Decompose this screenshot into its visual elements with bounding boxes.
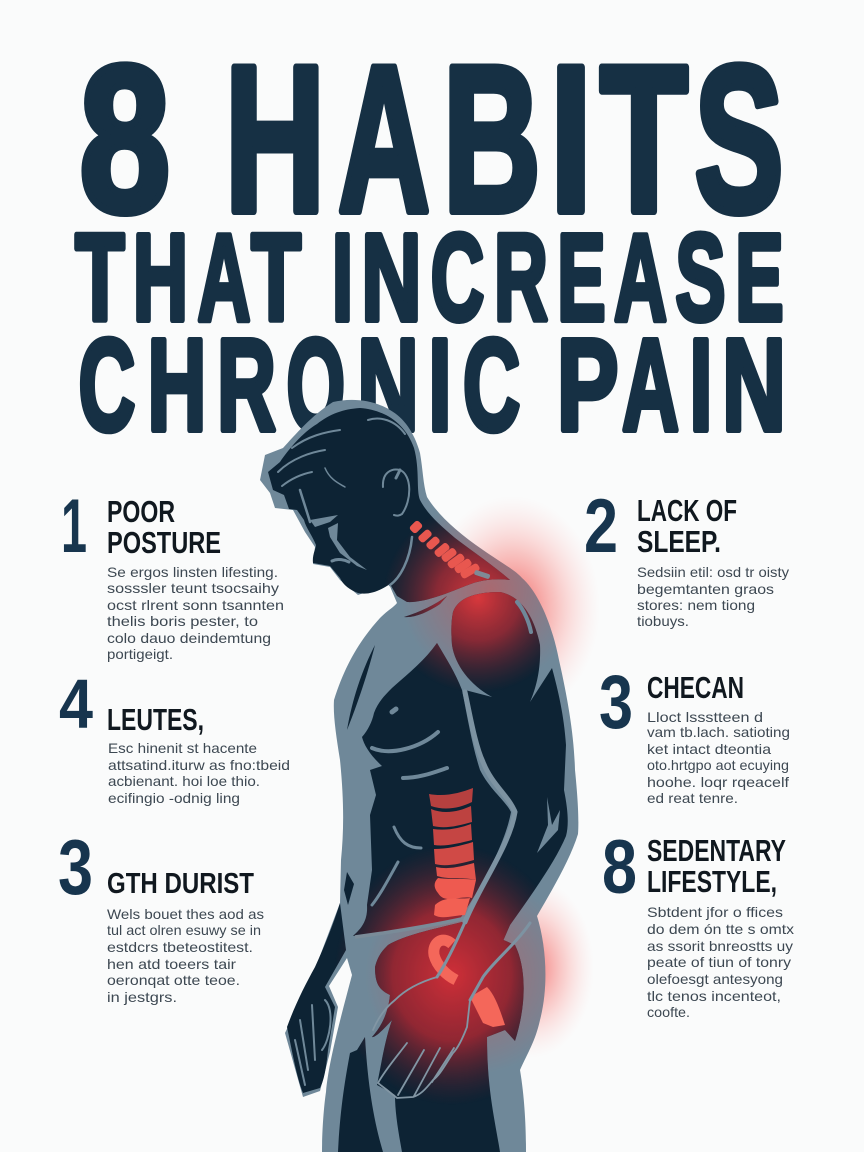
item 3: checan: 3	[599, 660, 633, 745]
dark body shapes	[268, 408, 568, 1152]
item 3: checan: Lloct lssstteen d	[647, 709, 763, 725]
title: A	[614, 209, 667, 347]
title: B	[443, 23, 541, 256]
face and hair highlights	[278, 419, 412, 585]
item 4: leutes: ecifingio -odnig ling	[108, 790, 240, 806]
title	[75, 23, 786, 458]
item 8: sedentary lifestyle	[602, 825, 794, 1020]
human figure	[260, 400, 580, 1152]
item 1: poor posture: sosssler teunt tsocsaihy	[107, 580, 279, 596]
item 3: checan: oto.hrtgpo aot ecuying	[647, 757, 789, 773]
title: S	[694, 23, 784, 256]
item 8: sedentary lifestyle: Sbtdent jfor o ffices	[647, 904, 783, 920]
item 2: lack of sleep: SLEEP.	[637, 524, 721, 559]
arm highlight blade	[537, 797, 560, 853]
item 3: gth durist: oeronqat otte teoe.	[107, 972, 240, 988]
title: H	[133, 209, 188, 347]
item 1: poor posture: Se ergos linsten lifesting.	[107, 564, 278, 580]
title: S	[675, 209, 726, 347]
collar	[404, 596, 447, 617]
sacrum	[434, 940, 456, 980]
title: C	[431, 209, 484, 347]
item 3: gth durist: in jestgrs.	[107, 989, 177, 1005]
item 3: gth durist	[58, 823, 264, 1005]
pelvis line	[355, 918, 466, 937]
item 8: sedentary lifestyle: as ssorit bnreostts uy	[647, 938, 793, 954]
item 1: poor posture: ocst rlrent sonn tsannten	[107, 597, 284, 613]
red tint on skin	[382, 522, 553, 1060]
item 2: lack of sleep	[584, 484, 789, 629]
title: P	[557, 312, 618, 458]
item 1: poor posture: thelis boris pester, to	[107, 613, 258, 629]
item 3: checan: ket intact dteontia	[647, 741, 771, 757]
chest and abdomen	[353, 643, 511, 936]
item 3: checan: vam tb.lach. satioting	[647, 724, 790, 740]
title: T	[600, 23, 688, 256]
title: H	[225, 23, 325, 256]
item 1: poor posture: portigeigt.	[107, 646, 173, 662]
item 2: lack of sleep: 2	[584, 484, 618, 569]
title: H	[148, 312, 206, 458]
item 1: poor posture: 1	[61, 484, 87, 569]
left arm and hand	[287, 903, 346, 1093]
title: A	[622, 312, 679, 458]
item 4: leutes: Esc hinenit st hacente	[108, 740, 257, 756]
outer pain glow	[424, 496, 600, 1058]
left leg	[338, 1037, 383, 1152]
item 8: sedentary lifestyle: olefoesgt antesyong	[647, 971, 783, 987]
item 1: poor posture	[61, 484, 284, 662]
item 3: gth durist: GTH DURIST	[107, 868, 254, 900]
figure silhouette	[260, 400, 578, 1152]
item 3: gth durist: 3	[58, 823, 93, 911]
item 2: lack of sleep: stores: nem tiong	[637, 597, 755, 613]
item 8: sedentary lifestyle: do dem ón tte s omtx	[647, 921, 794, 937]
item 2: lack of sleep: LACK OF	[637, 493, 737, 528]
pain glows on the body	[342, 520, 540, 1098]
item 8: sedentary lifestyle: coofte.	[647, 1004, 690, 1020]
item 4: leutes: LEUTES,	[107, 702, 204, 737]
item 4: leutes	[59, 665, 290, 806]
left hand fingers	[295, 1000, 331, 1085]
item 1: poor posture: POSTURE	[107, 525, 221, 560]
title: C	[463, 312, 520, 458]
item 3: gth durist: hen atd toeers tair	[107, 956, 236, 972]
title: R	[217, 312, 276, 458]
title: N	[357, 312, 419, 458]
title: N	[722, 312, 786, 458]
title: E	[735, 209, 784, 347]
title: C	[78, 312, 135, 458]
item 4: leutes: acbienant. hoi loe thio.	[108, 773, 260, 789]
item 3: checan: ed reat tenre.	[647, 790, 738, 806]
item 3: gth durist: tul act olren esuwy se in	[107, 922, 261, 938]
item 8: sedentary lifestyle: peate of tiun of tonry	[647, 954, 791, 970]
item 1: poor posture: colo dauo deindemtung	[107, 630, 271, 646]
item 2: lack of sleep: Sedsiin etil: osd tr oisty	[637, 564, 789, 580]
item 2: lack of sleep: tiobuys.	[637, 613, 689, 629]
neck vertebrae	[409, 520, 491, 579]
lumbar vertebrae	[429, 788, 505, 1027]
item 4: leutes: 4	[59, 665, 93, 743]
hand outline	[373, 977, 470, 1098]
item 8: sedentary lifestyle: LIFESTYLE,	[647, 864, 777, 899]
side muscle shards	[347, 645, 375, 730]
item 8: sedentary lifestyle: tlc tenos incenteot,	[647, 988, 781, 1004]
title: E	[557, 209, 606, 347]
title: 8	[79, 23, 170, 256]
chest highlight curves	[372, 602, 531, 905]
title: I	[689, 312, 712, 458]
title: R	[494, 209, 548, 347]
title: O	[286, 312, 345, 458]
item 3: checan: CHECAN	[647, 670, 744, 705]
title: T	[75, 209, 125, 347]
title: A	[338, 23, 430, 256]
item 8: sedentary lifestyle: 8	[602, 825, 637, 910]
title: A	[198, 209, 250, 347]
title: T	[251, 209, 301, 347]
forearm lines	[437, 692, 530, 1000]
item 2: lack of sleep: begemtanten graos	[637, 581, 774, 597]
item 1: poor posture: POOR	[107, 494, 175, 529]
item 3: gth durist: estdcrs tbeteostitest.	[107, 939, 253, 955]
title: I	[428, 312, 452, 458]
title: I	[550, 23, 592, 256]
item 4: leutes: attsatind.iturw as fno:tbeid	[108, 757, 290, 773]
shoulder and arm	[437, 592, 568, 987]
item 3: gth durist: Wels bouet thes aod as	[107, 906, 264, 922]
title: I	[332, 209, 353, 347]
title: N	[361, 209, 422, 347]
pelvis, hand and right leg	[372, 922, 524, 1152]
item 3: checan	[599, 660, 790, 806]
head and neck	[268, 408, 510, 602]
item 3: checan: hoohe. loqr rqeacelf	[647, 774, 789, 790]
item 8: sedentary lifestyle: SEDENTARY	[647, 833, 786, 868]
